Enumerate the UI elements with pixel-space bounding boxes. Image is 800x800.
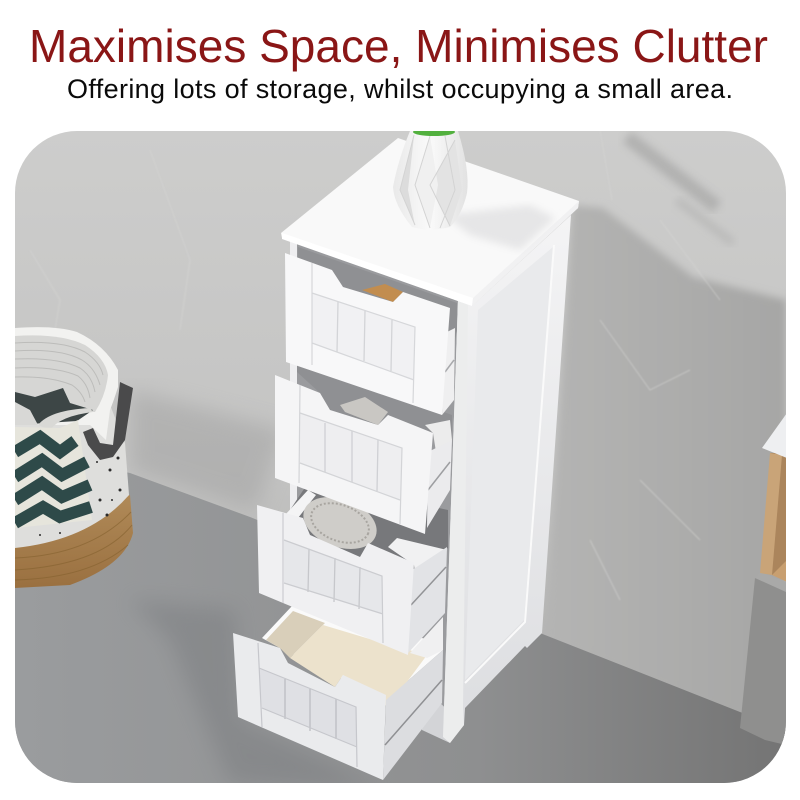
drawer 2 [275,360,452,534]
folded cloth in basket [15,388,93,425]
subtitle: Offering lots of storage, whilst occupying a small area. [67,74,733,104]
basket handle [83,382,133,460]
furniture at right edge [740,413,787,745]
product photo panel [15,128,787,790]
cabinet [233,128,579,780]
plant leaves [413,131,455,136]
sponge [303,497,377,549]
drawer 1 [285,247,457,415]
cabinet interior [290,240,458,720]
cabinet top [281,138,579,306]
title: Maximises Space, Minimises Clutter [29,20,768,72]
storage basket [15,327,133,588]
cabinet back leg [422,704,450,743]
floor shadow [150,606,334,782]
chevron blanket [46,420,78,430]
paper [388,538,447,568]
wall [15,131,786,783]
wall shadows [128,392,275,504]
floor [15,450,786,783]
vase [393,128,468,230]
drawer 4 [233,606,443,780]
towel [290,625,427,707]
cabinet side panel [443,215,571,743]
drawer 3 [257,480,448,655]
